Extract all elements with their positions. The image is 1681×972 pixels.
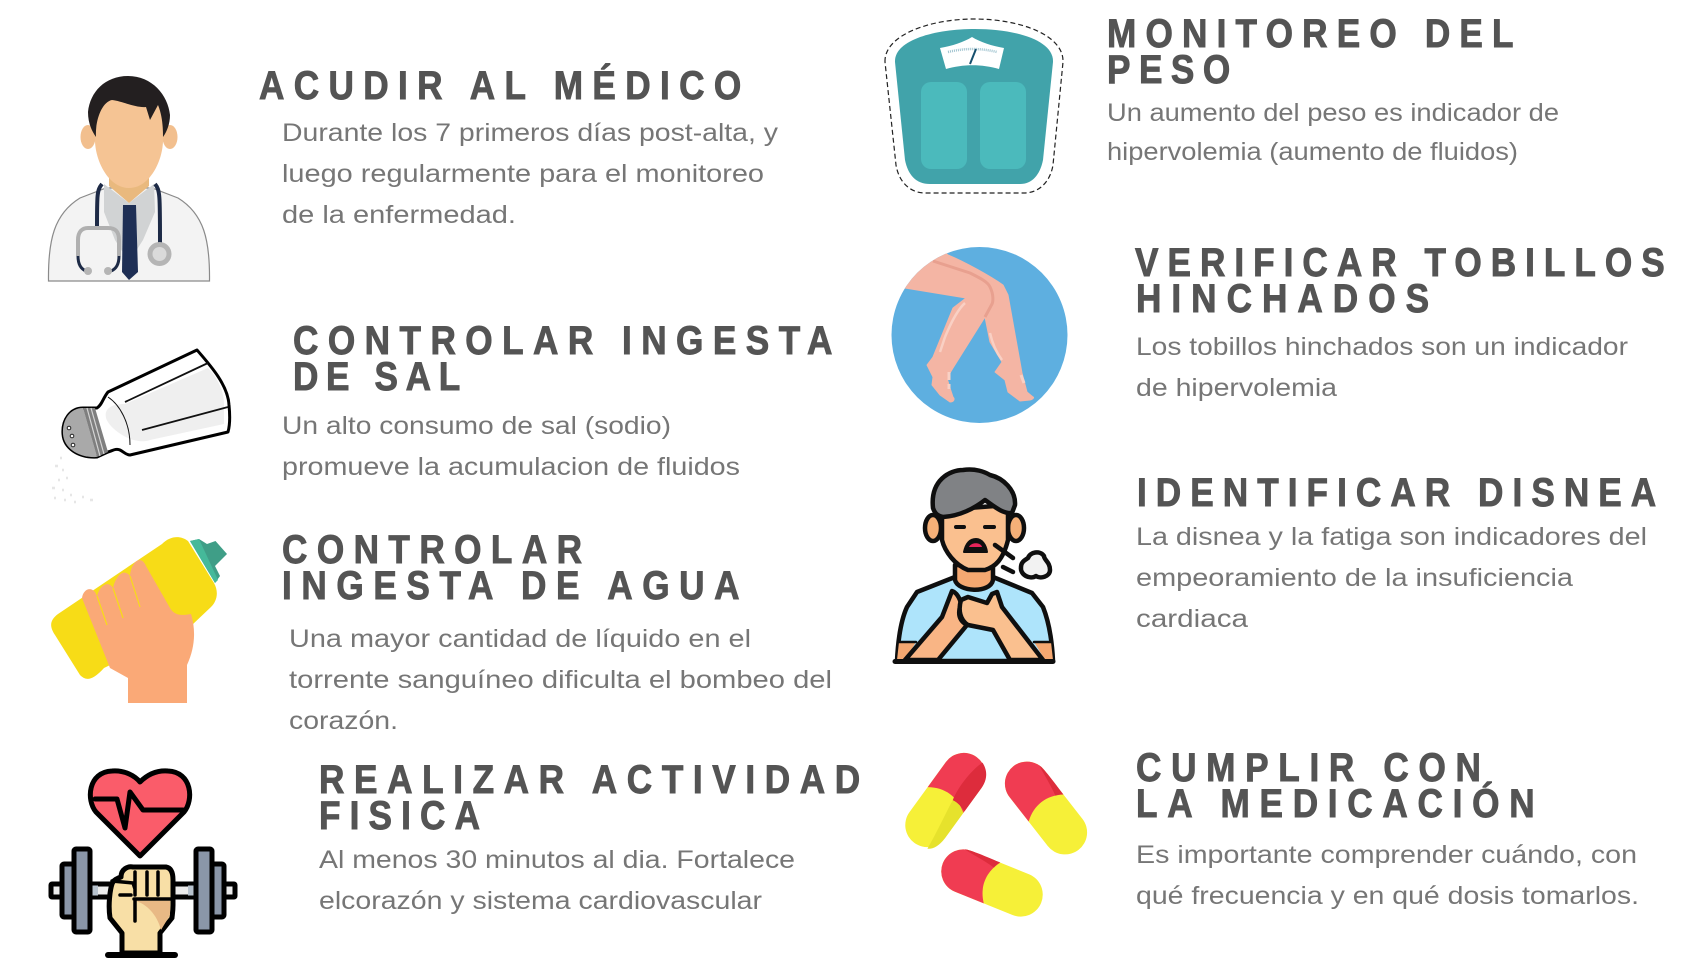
heading: ACUDIR AL MÉDICO [259, 63, 741, 107]
pill one [897, 744, 994, 856]
heading: IDENTIFICAR DISNEA [1137, 470, 1656, 514]
text block: La disnea y la fatiga son indicadores del [1136, 523, 1647, 551]
text block: Es importante comprender cuándo, con [1136, 841, 1637, 869]
panel: identificar disnea [895, 469, 1656, 662]
heading: REALIZAR ACTIVIDAD [319, 757, 860, 801]
pill two [996, 753, 1096, 863]
text block: Al menos 30 minutos al dia. Fortalece [319, 846, 795, 874]
panel: controlar ingesta de agua [51, 527, 832, 735]
icon: man with dyspnea [895, 469, 1053, 662]
panel: monitoreo del peso [885, 11, 1559, 193]
panel: verificar tobillos hinchados [892, 240, 1665, 423]
text block: Los tobillos hinchados son un indicador [1136, 333, 1628, 361]
icon: pills [897, 744, 1096, 923]
panel: cumplir con la medicación [897, 744, 1639, 923]
text block: Un aumento del peso es indicador de [1107, 99, 1559, 127]
text block: promueve la acumulacion de fluidos [282, 453, 740, 481]
panel: realizar actividad física [51, 757, 860, 955]
text block [1136, 523, 1647, 633]
text block [289, 625, 832, 735]
icon: salt shaker [52, 350, 230, 502]
text block: de la enfermedad. [282, 201, 516, 229]
panel: acudir al médico [48, 63, 779, 281]
text block: cardiaca [1136, 605, 1248, 633]
heading: CUMPLIR CON [1136, 745, 1481, 789]
icon: swollen legs [892, 240, 1068, 423]
icon: doctor [48, 76, 210, 281]
text block: elcorazón y sistema cardiovascular [319, 887, 762, 915]
text block [282, 412, 740, 481]
pill three [935, 843, 1049, 923]
text block: Durante los 7 primeros días post-alta, y [282, 119, 779, 147]
text block: corazón. [289, 707, 398, 735]
heading line 2: DE SAL [293, 354, 460, 398]
text block: torrente sanguíneo dificulta el bombeo del [289, 666, 832, 694]
icon: water bottle in hand [51, 537, 227, 703]
heading: CONTROLAR INGESTA [293, 318, 832, 362]
heading line 2: FISICA [319, 793, 480, 837]
text block: luego regularmente para el monitoreo [282, 160, 764, 188]
heading line 2: LA MEDICACIÓN [1136, 781, 1535, 825]
text block: qué frecuencia y en qué dosis tomarlos. [1136, 882, 1639, 910]
icon: weighing scale [885, 19, 1063, 193]
text block [282, 119, 779, 229]
text block [1136, 841, 1639, 910]
text block [319, 846, 795, 915]
text block [1107, 99, 1559, 166]
heading line 2: INGESTA DE AGUA [282, 563, 740, 607]
text block: de hipervolemia [1136, 374, 1337, 402]
panel: controlar ingesta de sal [52, 318, 832, 502]
heading line 2: HINCHADOS [1136, 276, 1429, 320]
heading: MONITOREO DEL [1107, 11, 1514, 55]
heading: VERIFICAR TOBILLOS [1135, 240, 1665, 284]
text block [1136, 333, 1628, 402]
text block: empeoramiento de la insuficiencia [1136, 564, 1573, 592]
text block: Un alto consumo de sal (sodio) [282, 412, 671, 440]
icon: heart and dumbbell [51, 771, 235, 955]
heading line 2: PESO [1107, 47, 1230, 91]
text block: Una mayor cantidad de líquido en el [289, 625, 751, 653]
heading: CONTROLAR [282, 527, 582, 571]
text block: hipervolemia (aumento de fluidos) [1107, 138, 1518, 166]
